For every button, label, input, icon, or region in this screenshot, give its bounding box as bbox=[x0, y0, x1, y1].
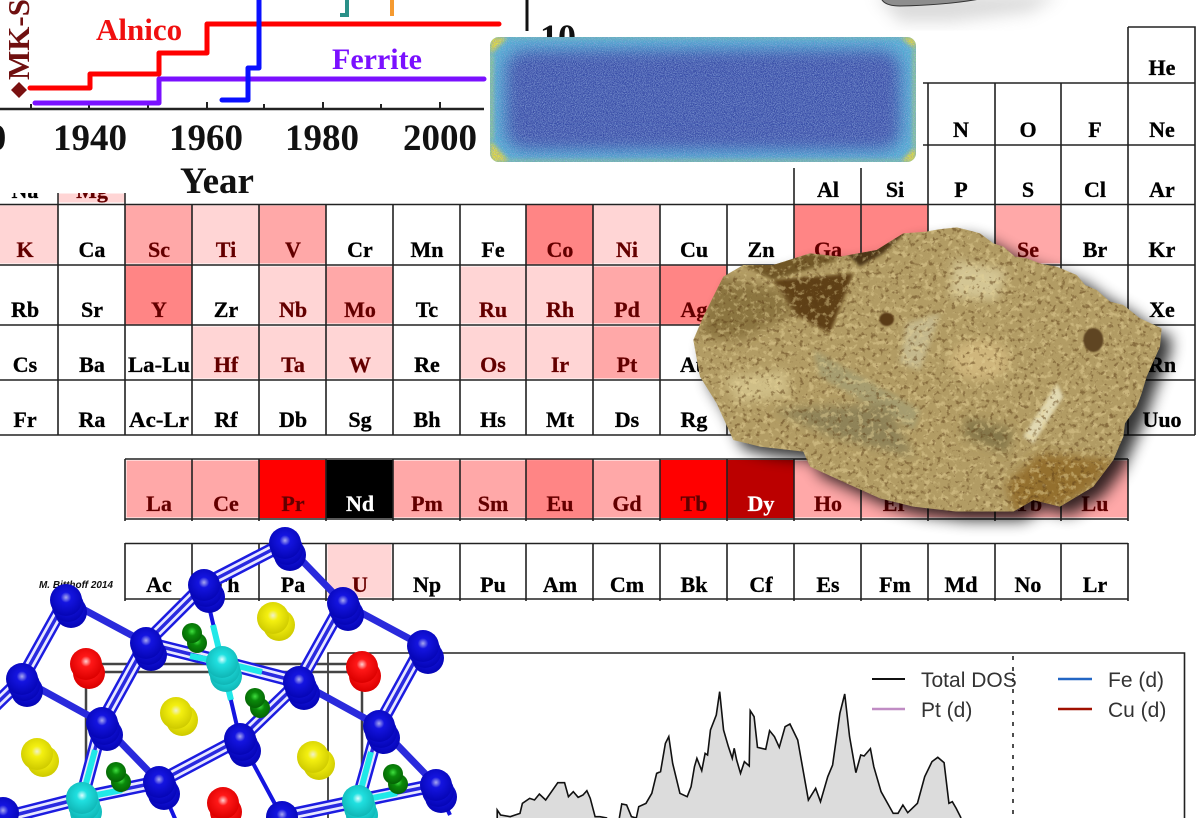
element symbols: period 7: Ra bbox=[79, 407, 105, 432]
lanthanide row fills bbox=[126, 460, 1128, 518]
DOS filled curve bbox=[497, 692, 961, 818]
element symbols: period 6: W bbox=[349, 352, 371, 377]
element symbols: lanthanides: Pr bbox=[281, 491, 305, 516]
element symbols: lanthanides: Lu bbox=[1082, 491, 1108, 516]
element symbols: period 4: Mn bbox=[410, 237, 444, 262]
element symbols: lanthanides: Dy bbox=[748, 491, 774, 516]
element symbols: period 7 bbox=[13, 407, 1182, 432]
element symbols: period 7: Ac-Lr bbox=[129, 407, 189, 432]
element symbols: period 5: Rb bbox=[11, 297, 39, 322]
triple bonds bbox=[0, 543, 436, 817]
green atoms bbox=[106, 623, 408, 794]
thin bonds bbox=[159, 585, 450, 818]
legend: Cu (d) bbox=[1108, 699, 1166, 722]
cyan bond segments bbox=[82, 625, 397, 801]
element symbols: lanthanides: Ho bbox=[814, 491, 842, 516]
highlighted cells: main block bbox=[0, 205, 1061, 379]
element symbols: upper rows: Al bbox=[817, 177, 839, 202]
element symbols: lanthanides: Er bbox=[883, 491, 907, 516]
element symbols: actinides: Fm bbox=[879, 572, 911, 597]
element symbols: period 5: Zr bbox=[214, 297, 238, 322]
credit: M. Bitthoff 2014 bbox=[39, 580, 113, 591]
element symbols: period 6 bbox=[13, 352, 1176, 377]
element symbols: period 4: K bbox=[16, 237, 34, 262]
element symbols: period 5: Rh bbox=[546, 297, 574, 322]
x axis year labels bbox=[0, 118, 477, 159]
line: Alnico bbox=[30, 24, 499, 88]
element symbols: lanthanides: Eu bbox=[547, 491, 573, 516]
element symbols: actinides: Lr bbox=[1083, 572, 1107, 597]
element symbols: period 4: Br bbox=[1083, 237, 1107, 262]
object: grey device edge with shadow bbox=[875, 0, 1060, 22]
solid bonds bbox=[22, 543, 436, 785]
periodic table bbox=[0, 27, 1195, 601]
element symbols: period 4: Co bbox=[547, 237, 573, 262]
element symbols: period 5: Sr bbox=[81, 297, 103, 322]
x axis with ticks bbox=[0, 102, 484, 109]
element symbols: upper rows: Si bbox=[886, 177, 904, 202]
x axis year labels: 1980 bbox=[285, 118, 359, 159]
element symbols: actinides: Cm bbox=[610, 572, 644, 597]
element symbols: period 4: Se bbox=[1017, 237, 1039, 262]
element symbols: period 7: Rf bbox=[214, 407, 238, 432]
element symbols: actinides: Pu bbox=[480, 572, 506, 597]
element symbols: period 6: Os bbox=[480, 352, 506, 377]
rock body bbox=[693, 228, 1162, 512]
x axis title: Year bbox=[180, 161, 254, 202]
label: MK-S series: MK-S bbox=[1, 0, 36, 80]
element symbols: period 4: V bbox=[285, 237, 301, 262]
element symbols: upper rows: F bbox=[1088, 117, 1102, 142]
Mg and Na clipped row bbox=[12, 193, 126, 204]
chart frame bbox=[328, 653, 1184, 818]
element symbols: actinides: Th bbox=[213, 572, 239, 597]
element symbols: period 6: Pt bbox=[617, 352, 638, 377]
element symbols: lanthanides: Yb bbox=[1014, 491, 1042, 516]
x axis year labels: 1960 bbox=[169, 118, 243, 159]
element symbols: upper rows: Ne bbox=[1149, 117, 1175, 142]
element symbols: period 5: Nb bbox=[279, 297, 307, 322]
element symbols: upper rows: S bbox=[1022, 177, 1034, 202]
element symbols: period 6: Hf bbox=[214, 352, 239, 377]
element symbols: period 4 bbox=[16, 237, 1176, 262]
red atoms bbox=[70, 648, 381, 818]
element symbols: period 4: Zn bbox=[748, 237, 774, 262]
element symbols: period 6: Cs bbox=[13, 352, 38, 377]
rock shadow bbox=[703, 236, 1172, 520]
element symbols: upper rows: Cl bbox=[1084, 177, 1106, 202]
line: orange series end bbox=[390, 0, 394, 16]
element symbols: period 7: Sg bbox=[348, 407, 372, 432]
element symbols: period 7: Bh bbox=[414, 407, 440, 432]
photo: mineral rock with drop shadow bbox=[680, 217, 1180, 523]
element symbols: period 5: Ru bbox=[479, 297, 507, 322]
unit cell edges bbox=[86, 664, 362, 795]
right axis and clipped tick label: 10 bbox=[540, 17, 576, 57]
element symbols: period 6: La-Lu bbox=[128, 352, 190, 377]
line: blue magnet series bbox=[222, 0, 259, 100]
x axis year labels: 2000 bbox=[403, 118, 477, 159]
Fermi level dashed line bbox=[1012, 656, 1014, 818]
element symbols: lanthanides: Ce bbox=[213, 491, 239, 516]
element symbols: period 6: Ta bbox=[281, 352, 305, 377]
element symbols: period 4: Sc bbox=[148, 237, 170, 262]
element symbols: actinides: Ac bbox=[146, 572, 172, 597]
element symbols: period 5: Tc bbox=[416, 297, 438, 322]
element symbols: period 5 bbox=[11, 297, 1175, 322]
x axis year labels: 1940 bbox=[53, 118, 127, 159]
element symbols: period 5: Xe bbox=[1149, 297, 1175, 322]
element symbols: actinides bbox=[146, 572, 1107, 597]
line: Ferrite bbox=[35, 79, 484, 103]
element symbols: upper rows: P bbox=[954, 177, 968, 202]
line: teal series end bbox=[340, 0, 347, 15]
element symbols: upper rows: Ar bbox=[1149, 177, 1175, 202]
element symbols: period 7: Mt bbox=[546, 407, 575, 432]
legend bbox=[872, 669, 1166, 722]
crystal structure: ball-and-stick model bbox=[0, 527, 457, 818]
label: Ferrite: Ferrite bbox=[332, 43, 422, 76]
element symbols: upper rows bbox=[817, 55, 1176, 202]
element symbols: period 7: Ds bbox=[615, 407, 640, 432]
cyan atoms bbox=[66, 646, 378, 818]
element symbols: period 4: Ca bbox=[79, 237, 105, 262]
element symbols: period 4: Ga bbox=[814, 237, 842, 262]
element symbols: upper rows: O bbox=[1019, 117, 1037, 142]
element symbols: period 4: Fe bbox=[481, 237, 505, 262]
element symbols: actinides: U bbox=[352, 572, 368, 597]
element symbols: upper rows: N bbox=[953, 117, 969, 142]
element symbols: lanthanides: Pm bbox=[411, 491, 443, 516]
legend: Fe (d) bbox=[1108, 669, 1164, 692]
element symbols: lanthanides: Sm bbox=[478, 491, 508, 516]
right axis and clipped tick label bbox=[526, 0, 575, 37]
element symbols: lanthanides: Tm bbox=[944, 491, 978, 516]
element symbols: period 6: Rn bbox=[1148, 352, 1176, 377]
element symbols: lanthanides: Nd bbox=[346, 491, 374, 516]
element symbols: period 7: Rg bbox=[681, 407, 707, 432]
element symbols: actinides: No bbox=[1015, 572, 1041, 597]
element symbols: upper rows: He bbox=[1149, 55, 1176, 80]
Mg and Na clipped row: Na bbox=[12, 178, 38, 203]
element symbols: period 5: Mo bbox=[344, 297, 376, 322]
label: Alnico: Alnico bbox=[96, 12, 182, 47]
element symbols: actinides: Es bbox=[816, 572, 840, 597]
marker: diamond bbox=[11, 82, 27, 98]
element symbols: lanthanides: La bbox=[146, 491, 172, 516]
blue atoms bbox=[0, 527, 457, 818]
legend: Total DOS bbox=[921, 669, 1017, 692]
element symbols: period 7: Fr bbox=[13, 407, 37, 432]
element symbols: actinides: Pa bbox=[281, 572, 305, 597]
chart: density of states bbox=[328, 653, 1184, 818]
element symbols: period 4: Ni bbox=[616, 237, 638, 262]
element symbols: period 4: Cr bbox=[347, 237, 373, 262]
element symbols: period 6: Re bbox=[414, 352, 440, 377]
element symbols: period 7: Hs bbox=[480, 407, 506, 432]
element symbols: period 6: Au bbox=[680, 352, 708, 377]
element symbols: period 6: Ba bbox=[79, 352, 105, 377]
heat map image: noisy blue rectangle bbox=[490, 37, 916, 162]
element symbols: period 5: Pd bbox=[614, 297, 640, 322]
element symbols: period 7: Db bbox=[279, 407, 307, 432]
element symbols: period 5: Y bbox=[151, 297, 167, 322]
yellow atoms bbox=[21, 602, 335, 780]
element symbols: actinides: Md bbox=[944, 572, 978, 597]
Mg and Na clipped row: Mg bbox=[76, 178, 108, 203]
element symbols: actinides: Am bbox=[543, 572, 577, 597]
chart: magnet energy product timeline bbox=[0, 0, 576, 202]
element symbols: lanthanides bbox=[146, 491, 1108, 516]
legend: Pt (d) bbox=[921, 699, 972, 722]
element symbols: actinides: Bk bbox=[681, 572, 708, 597]
element symbols: lanthanides: Tb bbox=[681, 491, 707, 516]
element symbols: period 7: Uuo bbox=[1142, 407, 1182, 432]
table grid lines bbox=[0, 27, 1195, 601]
element symbols: period 4: Ti bbox=[216, 237, 236, 262]
element symbols: period 6: Ir bbox=[551, 352, 569, 377]
element symbols: actinides: Cf bbox=[749, 572, 773, 597]
element symbols: actinides: Np bbox=[413, 572, 441, 597]
element symbols: period 5: Ag bbox=[681, 297, 707, 322]
element symbols: lanthanides: Gd bbox=[612, 491, 642, 516]
uranium cell bbox=[327, 544, 392, 598]
element symbols: period 4: Kr bbox=[1149, 237, 1176, 262]
element symbols: period 4: Cu bbox=[680, 237, 708, 262]
